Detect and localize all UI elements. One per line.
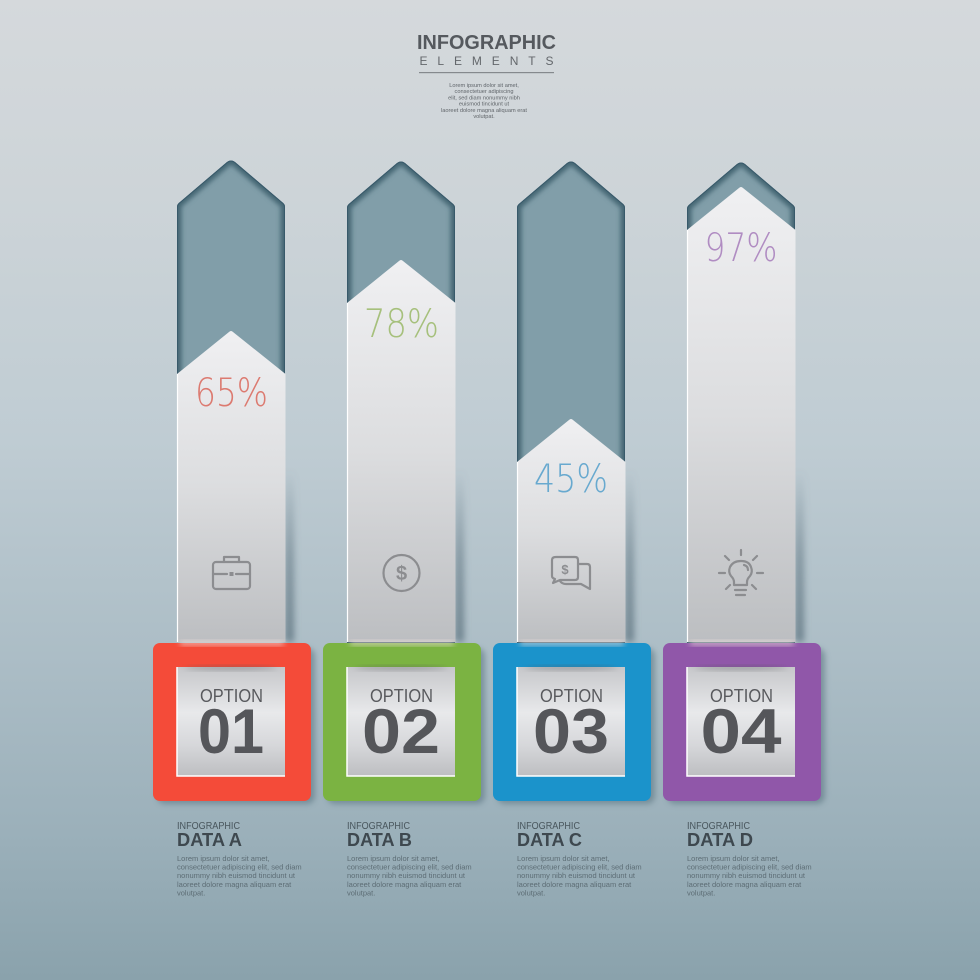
number: 03: 03 bbox=[533, 697, 609, 767]
data B text block: consectetuer adipiscing elit, sed diam bbox=[347, 862, 472, 872]
icon: dollar coin: $ bbox=[396, 563, 407, 585]
intro text: laoreet dolore magna aliquam erat bbox=[441, 108, 527, 114]
data B text block: INFOGRAPHIC bbox=[347, 821, 410, 832]
option 03 square bbox=[493, 641, 655, 804]
data C text block: INFOGRAPHIC bbox=[517, 821, 580, 832]
data A text block: nonummy nibh euismod tincidunt ut bbox=[177, 871, 296, 880]
intro text bbox=[441, 83, 527, 120]
column A arrow bar bbox=[177, 160, 294, 642]
data B text block: laoreet dolore magna aliquam erat bbox=[347, 880, 462, 889]
data A text block: volutpat. bbox=[177, 888, 205, 898]
intro text: volutpat. bbox=[473, 114, 495, 120]
option 02 square bbox=[323, 641, 485, 804]
intro text: consectetuer adipiscing bbox=[455, 89, 513, 95]
icon: chat bubbles with dollar bbox=[552, 557, 590, 589]
intro text: elit, sed diam nonummy nibh bbox=[448, 96, 520, 102]
column C arrow bar bbox=[517, 162, 634, 643]
label: option 04: OPTION bbox=[710, 686, 773, 706]
data D text block: volutpat. bbox=[687, 888, 715, 898]
data A text block bbox=[177, 821, 302, 898]
subheading: elements: ELEMENTS bbox=[420, 54, 554, 68]
data D text block: consectetuer adipiscing elit, sed diam bbox=[687, 862, 812, 872]
percentage 97: 97% bbox=[704, 226, 778, 271]
data C text block: DATA C bbox=[517, 830, 582, 850]
data A text block: Lorem ipsum dolor sit amet, bbox=[177, 854, 270, 863]
column D arrow bar bbox=[687, 162, 804, 644]
percentage 45: 45% bbox=[534, 457, 608, 502]
number: 01: 01 bbox=[198, 697, 264, 767]
percentage 78: 78% bbox=[364, 302, 439, 347]
data C text block bbox=[517, 821, 642, 898]
option 01 square bbox=[153, 641, 315, 804]
option 04 square bbox=[663, 641, 825, 804]
title block bbox=[417, 32, 556, 120]
column B arrow bar bbox=[347, 162, 464, 643]
data A text block: laoreet dolore magna aliquam erat bbox=[177, 880, 292, 889]
intro text: euismod tincidunt ut bbox=[459, 102, 510, 108]
intro text: Lorem ipsum dolor sit amet, bbox=[449, 83, 519, 89]
number: 04: 04 bbox=[700, 697, 782, 767]
data D text block: nonummy nibh euismod tincidunt ut bbox=[687, 871, 806, 880]
data A text block: INFOGRAPHIC bbox=[177, 821, 240, 832]
data A text block: consectetuer adipiscing elit, sed diam bbox=[177, 862, 302, 872]
data C text block: consectetuer adipiscing elit, sed diam bbox=[517, 862, 642, 872]
data D text block bbox=[687, 821, 812, 898]
label: option 01: OPTION bbox=[200, 686, 263, 706]
label: option 03: OPTION bbox=[540, 686, 603, 706]
data B text block bbox=[347, 821, 472, 898]
icon: briefcase bbox=[213, 557, 250, 589]
data A text block: DATA A bbox=[177, 830, 242, 850]
data C text block: laoreet dolore magna aliquam erat bbox=[517, 880, 632, 889]
data D text block: laoreet dolore magna aliquam erat bbox=[687, 880, 802, 889]
data B text block: DATA B bbox=[347, 830, 412, 850]
data B text block: nonummy nibh euismod tincidunt ut bbox=[347, 871, 466, 880]
icon: light bulb bbox=[719, 550, 763, 595]
data B text block: Lorem ipsum dolor sit amet, bbox=[347, 854, 440, 863]
label: option 02: OPTION bbox=[370, 686, 433, 706]
data C text block: Lorem ipsum dolor sit amet, bbox=[517, 854, 610, 863]
number: 02: 02 bbox=[362, 697, 440, 767]
percentage 65: 65% bbox=[195, 371, 268, 416]
heading: infographic: INFOGRAPHIC bbox=[417, 32, 556, 54]
data D text block: DATA D bbox=[687, 830, 753, 850]
icon: chat bubbles with dollar: $ bbox=[561, 562, 569, 577]
data D text block: Lorem ipsum dolor sit amet, bbox=[687, 854, 780, 863]
data D text block: INFOGRAPHIC bbox=[687, 821, 750, 832]
data C text block: nonummy nibh euismod tincidunt ut bbox=[517, 871, 636, 880]
icon: dollar coin bbox=[384, 555, 420, 591]
data C text block: volutpat. bbox=[517, 888, 545, 898]
data B text block: volutpat. bbox=[347, 888, 375, 898]
